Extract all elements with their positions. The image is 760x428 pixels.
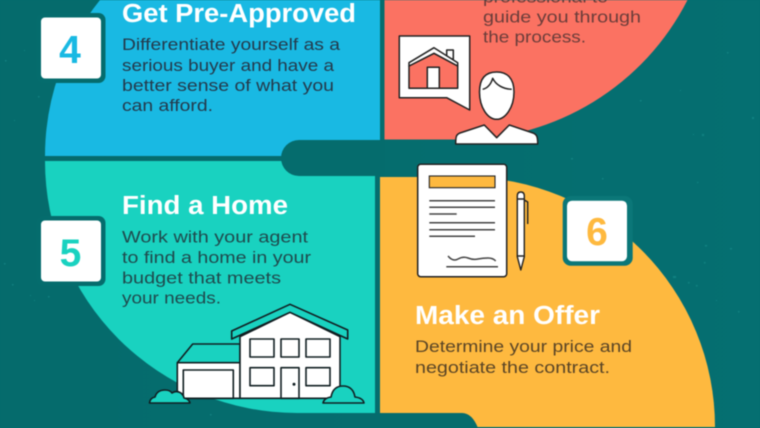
panel: make an offer [380, 177, 715, 427]
connector: bottom pill [370, 413, 478, 428]
text: get pre-approved description: serious buyer and have a [122, 57, 335, 75]
text: find a home description: to find a home in your [122, 249, 312, 267]
text: find a home description: budget that meets [122, 270, 281, 288]
text: agent description: guide you through [483, 8, 641, 26]
badge: step 5: 5 [60, 232, 81, 275]
text: find a home description: Work with your agent [122, 228, 308, 246]
panel: agent [384, 0, 688, 140]
text: get pre-approved description: can afford. [122, 97, 213, 115]
badge: step 6: 6 [586, 211, 608, 254]
heading: make an offer: Make an Offer [415, 302, 600, 330]
heading: find a home: Find a Home [122, 192, 288, 220]
text: agent description [483, 0, 641, 46]
icon: agent person [456, 72, 538, 144]
badge: step 5 [36, 216, 106, 286]
icon: speech bubble with house [399, 36, 470, 110]
text: make an offer description: Determine your price and [415, 338, 632, 356]
badge: step 6 [563, 196, 633, 266]
icon: pen [517, 192, 528, 270]
text: make an offer description: negotiate the contract. [415, 359, 610, 377]
text: agent description: the process. [483, 28, 586, 46]
badge: step 4: 4 [59, 29, 81, 72]
icon: house illustration [150, 304, 364, 403]
text: get pre-approved description [122, 36, 341, 115]
heading: get pre-approved: Get Pre-Approved [122, 0, 356, 28]
icon: contract document [418, 164, 507, 277]
text: find a home description [122, 228, 312, 308]
connector: middle pill [281, 140, 385, 176]
text: find a home description: your needs. [122, 290, 221, 308]
panel: find a home [45, 161, 375, 413]
badge: step 4 [36, 13, 106, 83]
text: get pre-approved description: Differentiate yourself as a [122, 36, 341, 54]
text: make an offer description [415, 338, 632, 377]
panel: get pre-approved [45, 0, 380, 156]
text: get pre-approved description: better sense of what you [122, 77, 334, 95]
